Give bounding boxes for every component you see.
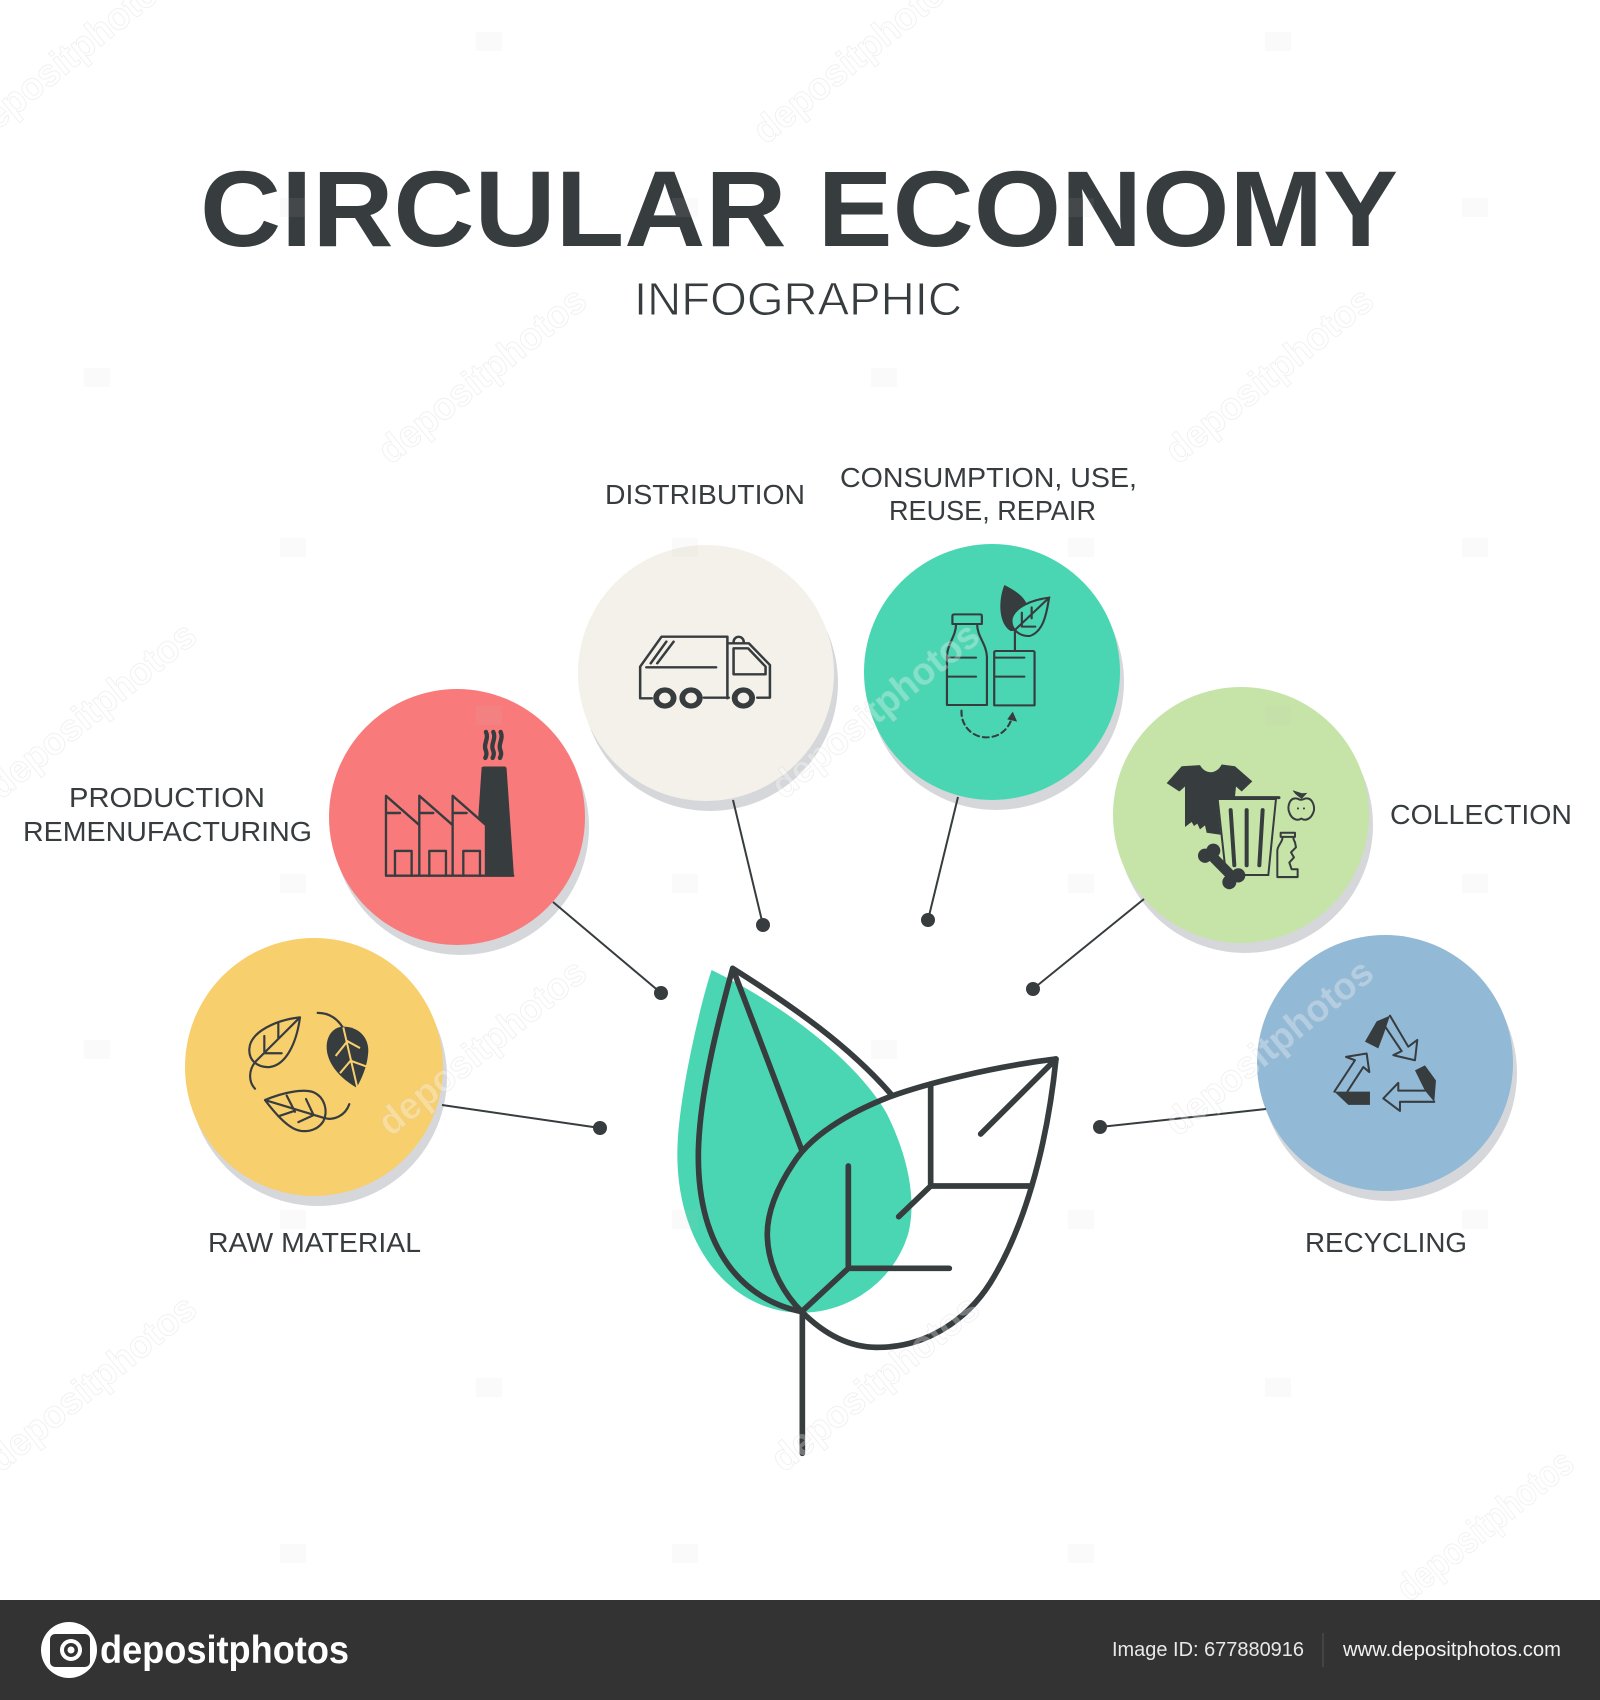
label: recycling: RECYCLING <box>1305 1227 1467 1258</box>
footer website: www.depositphotos.com <box>1342 1639 1561 1661</box>
circle: consumption <box>864 544 1124 810</box>
label: consumption: CONSUMPTION, USE, <box>840 462 1137 493</box>
watermark overlay: depositphotos <box>1157 951 1382 1144</box>
watermark overlay: depositphotos <box>370 279 595 472</box>
circle: distribution <box>578 545 838 811</box>
right leaf veins and stem <box>802 1059 1056 1453</box>
central leaf illustration <box>677 968 1056 1453</box>
connector: consumption <box>921 797 958 927</box>
icon: recycling arrows <box>1334 1016 1436 1111</box>
title: CIRCULAR ECONOMY <box>200 148 1398 269</box>
watermark overlay: depositphotos <box>370 951 595 1144</box>
left leaf outline <box>698 968 892 1312</box>
icon: factory <box>386 732 514 876</box>
icon: bottle and jar with plant <box>947 585 1049 737</box>
label: consumption: REUSE, REPAIR <box>889 495 1096 526</box>
connector: production <box>553 902 668 1000</box>
connector: distribution <box>733 800 770 932</box>
circle: production <box>329 689 589 955</box>
footer image id: Image ID: 677880916 <box>1112 1639 1304 1661</box>
label: raw material: RAW MATERIAL <box>208 1227 421 1258</box>
label: collection: COLLECTION <box>1390 799 1572 830</box>
teal leaf blob <box>677 970 912 1313</box>
right leaf outline <box>767 1059 1056 1347</box>
label: production <box>23 782 312 847</box>
watermark overlay: depositphotos <box>1157 279 1382 472</box>
connector: raw material <box>442 1105 607 1135</box>
footer brand name: depositphotos <box>100 1629 349 1672</box>
connector: collection <box>1026 899 1144 996</box>
icon: leaves cycle <box>249 1013 368 1131</box>
connector: recycling <box>1093 1109 1266 1134</box>
label: production: REMENUFACTURING <box>23 816 312 847</box>
watermark overlay: depositphotos <box>763 614 988 807</box>
icon: garbage truck <box>640 637 770 706</box>
label: distribution: DISTRIBUTION <box>605 479 805 510</box>
circle: recycling <box>1257 935 1517 1201</box>
circle: collection <box>1113 687 1373 953</box>
footer bar <box>0 1600 1600 1700</box>
label: consumption <box>840 462 1137 526</box>
watermark overlay: depositphotos <box>763 1287 988 1480</box>
subtitle: INFOGRAPHIC <box>634 273 962 325</box>
icon: footer camera logo <box>41 1622 97 1678</box>
icon: waste bin with shirt, bone, apple, bottle <box>1167 764 1314 889</box>
circle: raw material <box>185 938 447 1206</box>
label: production: PRODUCTION <box>69 782 265 813</box>
